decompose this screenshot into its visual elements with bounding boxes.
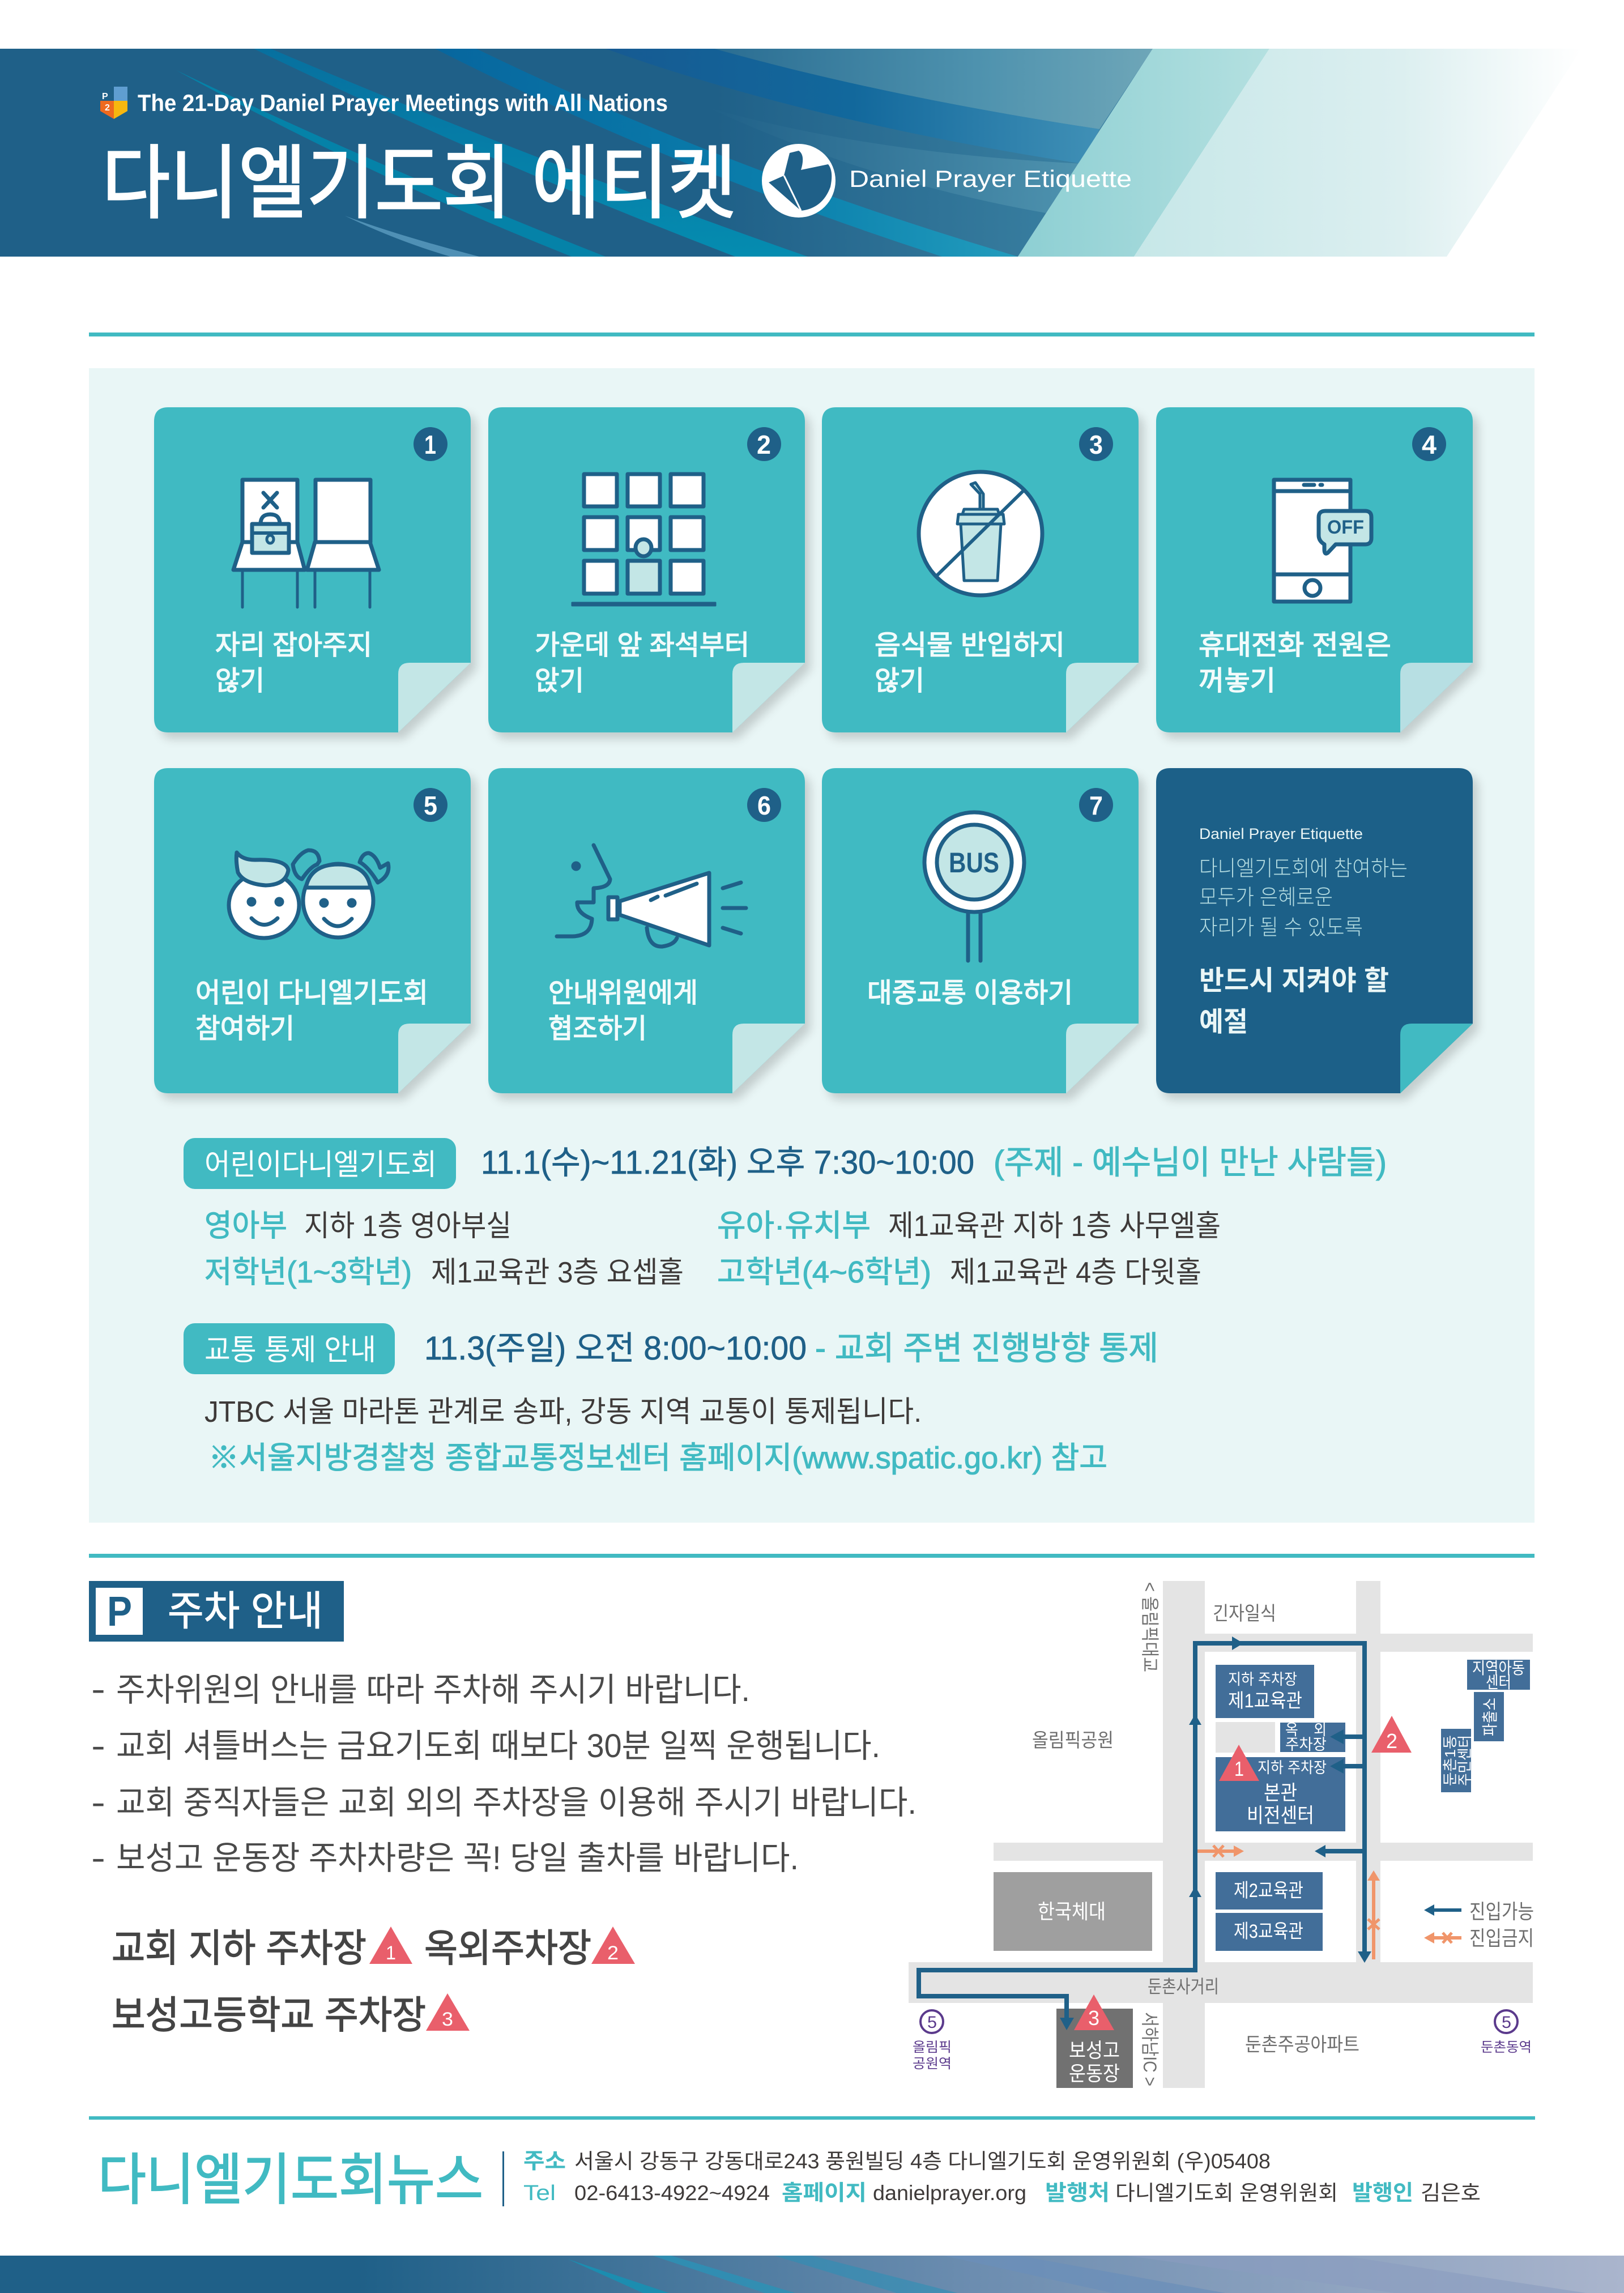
card 6: cooperate with ushers: 6	[757, 791, 771, 820]
roads	[909, 1581, 1533, 2088]
map labels: 제2교육관	[1234, 1880, 1303, 1902]
card 7: use public transit: 대중교통 이용하기	[867, 978, 1073, 1008]
traffic control notice: ※서울지방경찰청 종합교통정보센터 홈페이지(www.spatic.go.kr) 참고	[208, 1441, 1107, 1475]
route lines	[919, 1643, 1365, 2019]
footer band	[0, 2256, 1624, 2293]
card 5: children's prayer meeting: 참여하기	[195, 1014, 295, 1044]
header banner	[0, 49, 1582, 257]
card 2: sit from front center	[488, 407, 805, 732]
map labels: 지하 주차장	[1258, 1759, 1327, 1776]
icon: megaphone speaker	[557, 845, 746, 947]
children's prayer meeting notice: 유아·유치부	[717, 1209, 871, 1243]
parking location legend: 교회 지하 주차장	[112, 1927, 366, 1970]
icon: prohibited drink	[919, 472, 1042, 595]
card 4: phones off	[1156, 407, 1473, 732]
card 5: children's prayer meeting	[154, 768, 471, 1093]
parking markers: 2	[1386, 1729, 1397, 1753]
card 8: summary note: 다니엘기도회에 참여하는	[1199, 857, 1408, 881]
footer contact info: 다니엘기도회 운영위원회	[1115, 2181, 1338, 2205]
map labels: 주민센터	[1456, 1735, 1473, 1786]
footer contact info: 서울시 강동구 강동대로243 풍원빌딩 4층 다니엘기도회 운영위원회 (우)05408	[574, 2150, 1271, 2173]
footer contact info: 발행처	[1045, 2181, 1110, 2205]
parking instructions: -	[91, 1728, 105, 1764]
map legend: 진입가능	[1469, 1900, 1534, 1923]
parking instructions	[91, 1671, 917, 1877]
children's prayer meeting notice: 고학년(4~6학년)	[717, 1255, 931, 1289]
children's prayer meeting notice: 저학년(1~3학년)	[204, 1255, 412, 1289]
parking instructions: 교회 중직자들은 교회 외의 주차장을 이용해 주시기 바랍니다.	[116, 1784, 917, 1821]
icon: children faces	[229, 850, 389, 938]
map labels: 주차장	[1285, 1736, 1327, 1753]
icon: seat grid	[572, 474, 715, 606]
card 6: cooperate with ushers	[488, 768, 805, 1093]
english title: Daniel Prayer Etiquette	[849, 165, 1132, 192]
subway stations: 둔촌동역	[1481, 2040, 1532, 2055]
footer contact info: Tel	[523, 2181, 556, 2205]
children's prayer meeting notice: 제1교육관 4층 다윗홀	[950, 1256, 1201, 1289]
parking instructions: 보성고 운동장 주차차량은 꼭! 당일 출차를 바랍니다.	[116, 1840, 799, 1877]
map labels: 비전센터	[1247, 1804, 1314, 1827]
icon: thumbs up	[762, 144, 836, 218]
map labels: 운동장	[1069, 2062, 1120, 2085]
subway stations: 공원역	[913, 2056, 952, 2072]
parking instructions: -	[91, 1784, 105, 1821]
card 7: use public transit	[822, 768, 1139, 1093]
icon: chairs with bag	[233, 480, 379, 607]
children's prayer meeting notice: 제1교육관 지하 1층 사무엘홀	[888, 1210, 1221, 1243]
card 8: summary note: Daniel Prayer Etiquette	[1199, 825, 1363, 842]
card 3: no food or drink: 음식물 반입하지	[875, 630, 1065, 660]
card 6: cooperate with ushers: 안내위원에게	[548, 978, 698, 1008]
children's prayer meeting notice: (주제 - 예수님이 만난 사람들)	[994, 1144, 1387, 1181]
parking markers: 3	[1088, 2006, 1099, 2030]
footer contact info: danielprayer.org	[873, 2181, 1026, 2205]
traffic control notice: 교통 통제 안내	[204, 1334, 376, 1367]
card 2: sit from front center: 2	[757, 430, 771, 459]
parking heading	[89, 1581, 344, 1642]
parking heading: 주차 안내	[168, 1589, 323, 1634]
children's prayer meeting notice: 지하 1층 영아부실	[304, 1210, 512, 1243]
icon: logo shield: P	[102, 92, 108, 101]
subway stations: 올림픽	[913, 2040, 952, 2055]
no-entry arrows	[1197, 1846, 1380, 1959]
map labels: 보성고	[1069, 2039, 1120, 2062]
card 4: phones off: 4	[1422, 430, 1437, 459]
map labels: 지하 주차장	[1228, 1671, 1297, 1688]
icon: bus stop sign: BUS	[949, 847, 999, 879]
card 3: no food or drink: 않기	[875, 666, 924, 696]
subway stations: 5	[927, 2013, 937, 2032]
icon: logo shield: 2	[105, 103, 110, 113]
card 8: summary note: 예절	[1199, 1007, 1248, 1037]
parking location legend: 3	[442, 2009, 453, 2030]
traffic control notice: 11.3(주일) 오전 8:00~10:00	[424, 1330, 807, 1367]
map labels: < 올림픽대교	[1140, 1582, 1160, 1672]
card 5: children's prayer meeting: 어린이 다니엘기도회	[195, 978, 428, 1008]
card 8: summary note: 반드시 지켜야 할	[1199, 966, 1389, 996]
parking location legend: 2	[607, 1942, 619, 1964]
parking instructions: -	[91, 1840, 105, 1877]
panel: etiquette and notices	[89, 368, 1535, 1523]
footer contact info: 김은호	[1421, 2181, 1481, 2205]
parking map	[909, 1581, 1534, 2088]
map labels: 긴자일식	[1213, 1603, 1276, 1625]
card 1: no saving seats	[154, 407, 471, 732]
subway stations: 5	[1502, 2013, 1511, 2032]
map labels: 옥 외	[1285, 1721, 1327, 1738]
map labels	[1032, 1582, 1525, 2086]
parking location legend: 옥외주차장	[424, 1927, 591, 1970]
map labels: 한국체대	[1038, 1900, 1106, 1923]
parking instructions: -	[91, 1671, 105, 1708]
card 4: phones off: 꺼놓기	[1199, 666, 1276, 696]
children's prayer meeting notice: 제1교육관 3층 요셉홀	[431, 1256, 684, 1289]
children's prayer meeting notice: 11.1(수)~11.21(화) 오후 7:30~10:00	[481, 1144, 974, 1181]
parking heading: P	[107, 1588, 132, 1635]
parking markers: 1	[1234, 1757, 1244, 1780]
parking instructions: 교회 셔틀버스는 금요기도회 때보다 30분 일찍 운행됩니다.	[116, 1728, 880, 1764]
card 2: sit from front center: 가운데 앞 좌석부터	[535, 630, 749, 660]
footer contact info: 주소	[523, 2150, 566, 2173]
card 8: summary note: 모두가 은혜로운	[1199, 886, 1333, 910]
map labels: 제1교육관	[1228, 1690, 1302, 1712]
event subtitle: The 21-Day Daniel Prayer Meetings with All Nations	[138, 89, 668, 116]
card 1: no saving seats: 1	[424, 430, 436, 459]
title: 다니엘기도회 에티켓	[102, 139, 736, 229]
map labels: 파출소	[1481, 1698, 1499, 1736]
parking location legend: 1	[386, 1942, 396, 1964]
parking markers	[1074, 1716, 1412, 2030]
route arrows	[1060, 1636, 1371, 2030]
card 3: no food or drink	[822, 407, 1139, 732]
traffic control notice	[184, 1323, 1158, 1475]
map labels: 제3교육관	[1234, 1921, 1303, 1942]
card 4: phones off: 휴대전화 전원은	[1199, 630, 1391, 660]
card 8: summary note: 자리가 될 수 있도록	[1199, 916, 1363, 940]
map legend: 진입금지	[1469, 1927, 1534, 1950]
footer contact info: 홈페이지	[782, 2181, 867, 2205]
card 3: no food or drink: 3	[1089, 430, 1103, 459]
card 1: no saving seats: 자리 잡아주지	[215, 630, 372, 660]
card 1: no saving seats: 않기	[215, 666, 265, 696]
map legend	[1424, 1900, 1534, 1950]
map labels: 본관	[1264, 1781, 1297, 1804]
parking location legend: 보성고등학교 주차장	[112, 1994, 426, 2037]
footer contact info: 02-6413-4922~4924	[574, 2181, 770, 2205]
map labels: 둔촌주공아파트	[1245, 2034, 1359, 2056]
card 2: sit from front center: 앉기	[535, 666, 584, 696]
footer contact info	[523, 2150, 1481, 2205]
subway stations	[913, 2010, 1532, 2072]
card 5: children's prayer meeting: 5	[424, 791, 437, 820]
parking location legend	[112, 1927, 635, 2037]
card 6: cooperate with ushers: 협조하기	[548, 1014, 647, 1044]
icon: bus stop sign	[924, 812, 1024, 961]
card 8: summary note	[1156, 768, 1473, 1093]
buildings	[994, 1660, 1530, 2088]
footer masthead: 다니엘기도회뉴스	[98, 2149, 483, 2211]
children's prayer meeting notice	[184, 1138, 1387, 1289]
map labels: 올림픽공원	[1032, 1730, 1114, 1751]
traffic control notice: - 교회 주변 진행방향 통제	[815, 1330, 1158, 1367]
map labels: 지역아동	[1472, 1660, 1525, 1678]
icon: logo shield	[100, 87, 127, 119]
icon: phone off: OFF	[1327, 517, 1364, 538]
footer contact info: 발행인	[1352, 2181, 1413, 2205]
card 7: use public transit: 7	[1089, 791, 1103, 820]
map labels: 센터	[1486, 1674, 1511, 1692]
map labels: 둔촌1동	[1442, 1735, 1459, 1786]
children's prayer meeting notice: 영아부	[204, 1209, 287, 1243]
children's prayer meeting notice: 어린이다니엘기도회	[204, 1149, 437, 1182]
traffic control notice: JTBC 서울 마라톤 관계로 송파, 강동 지역 교통이 통제됩니다.	[204, 1396, 922, 1429]
parking instructions: 주차위원의 안내를 따라 주차해 주시기 바랍니다.	[116, 1672, 750, 1708]
map labels: 서하남IC >	[1140, 2012, 1160, 2086]
map labels: 둔촌사거리	[1148, 1976, 1219, 1997]
icon: phone off	[1274, 480, 1371, 602]
